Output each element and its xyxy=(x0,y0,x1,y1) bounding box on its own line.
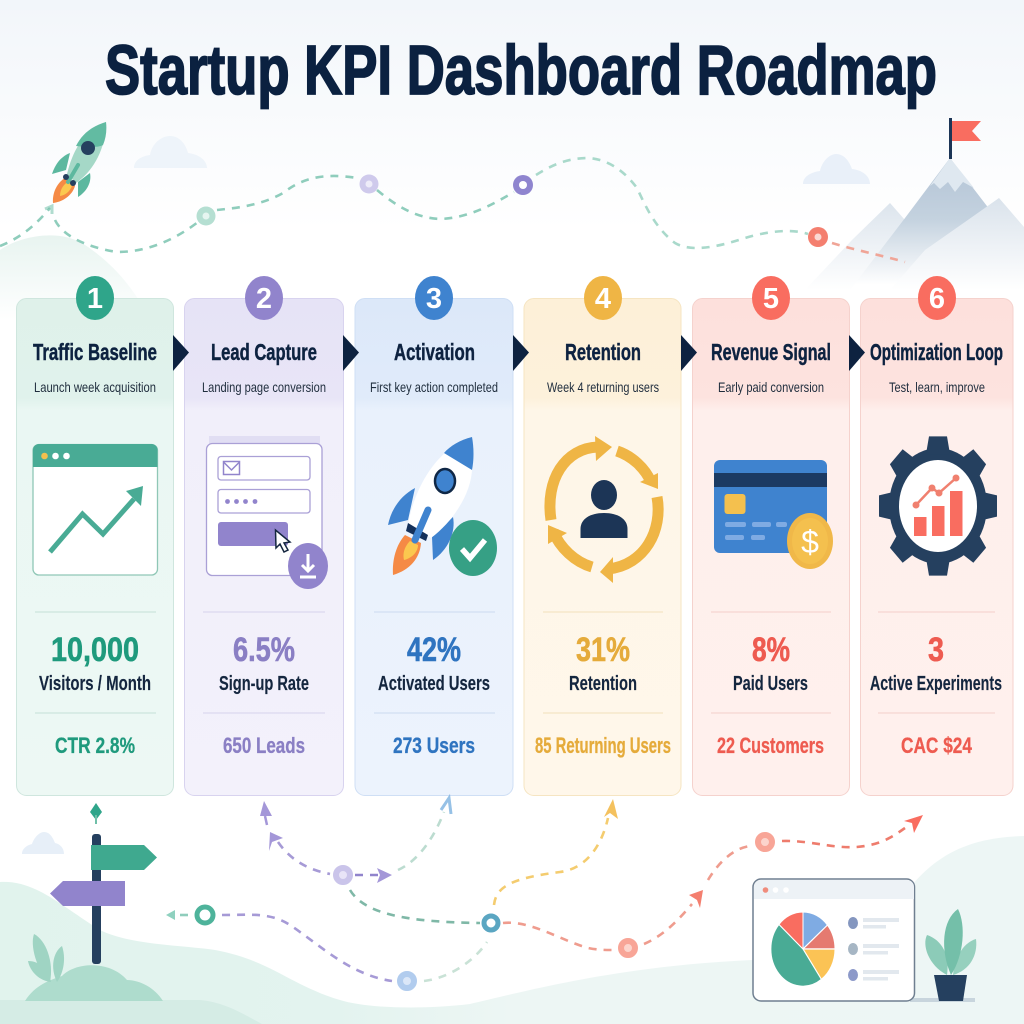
step badge 2: 2 xyxy=(256,283,272,315)
step badge 4: 4 xyxy=(595,283,611,315)
hill: bottom foreground xyxy=(0,1000,262,1024)
metric value: 3 xyxy=(928,631,944,669)
step subtitle: Launch week acquisition xyxy=(34,379,156,395)
icon: gear with chart xyxy=(855,408,1021,604)
icon: small plant xyxy=(28,934,64,982)
secondary metric: CAC $24 xyxy=(901,733,973,758)
node xyxy=(621,941,635,955)
icon: browser trend chart xyxy=(33,444,158,575)
hill: top left xyxy=(0,235,150,320)
step badge 1: 1 xyxy=(87,283,103,315)
cloud: bottom left xyxy=(22,832,64,854)
node xyxy=(336,868,350,882)
step badge 3 xyxy=(415,276,453,320)
mountains with summit flag xyxy=(805,118,1024,290)
metric label: Visitors / Month xyxy=(39,673,151,695)
icon: retention loop with user xyxy=(548,436,658,583)
metric value: 6.5% xyxy=(233,631,295,669)
step heading: Activation xyxy=(394,339,475,365)
step subtitle: Early paid conversion xyxy=(718,379,824,395)
step badge 5: 5 xyxy=(763,283,779,315)
step heading: Revenue Signal xyxy=(711,339,831,365)
secondary metric: 273 Users xyxy=(393,733,475,758)
step subtitle: First key action completed xyxy=(370,379,498,395)
metric value: 31% xyxy=(576,631,630,669)
page background xyxy=(0,0,1024,230)
node xyxy=(484,916,498,930)
metric label: Paid Users xyxy=(733,673,808,695)
step subtitle: Week 4 returning users xyxy=(547,379,659,395)
hill: bottom continuous band xyxy=(0,836,1024,1024)
node xyxy=(360,174,378,194)
step heading: Retention xyxy=(565,339,641,365)
secondary metric: 22 Customers xyxy=(717,733,824,758)
arrow: step 3 to 4 xyxy=(513,335,529,371)
panel: Activation xyxy=(355,298,513,796)
icon: rocket with check badge xyxy=(388,437,497,576)
step subtitle: Test, learn, improve xyxy=(889,379,985,395)
panel: Lead Capture xyxy=(184,298,344,796)
panel: Traffic Baseline xyxy=(16,298,174,796)
icon: sign-up form xyxy=(206,436,328,589)
step badge 3: 3 xyxy=(426,283,442,315)
node xyxy=(758,835,772,849)
step badge 6: 6 xyxy=(929,283,945,315)
icon: potted plant xyxy=(925,909,976,1001)
arrow: step 4 to 5 xyxy=(681,335,697,371)
node xyxy=(808,227,828,247)
legend xyxy=(848,917,899,981)
step heading: Lead Capture xyxy=(211,339,317,365)
metric label: Activated Users xyxy=(378,673,490,695)
node xyxy=(197,907,213,923)
panel: Retention xyxy=(524,298,681,796)
step badge 2 xyxy=(245,276,283,320)
step heading: Traffic Baseline xyxy=(33,339,157,365)
arrow: step 5 to 6 xyxy=(849,335,865,371)
ground shadow xyxy=(910,998,975,1002)
metric value: 10,000 xyxy=(51,631,139,669)
secondary metric: 650 Leads xyxy=(223,733,305,758)
pie chart xyxy=(771,912,835,986)
step badge 5 xyxy=(752,276,790,320)
icon: dashboard window with pie chart xyxy=(753,879,914,1001)
icon: green rocket xyxy=(52,122,106,203)
icon: flag xyxy=(949,118,981,159)
cloud: top left xyxy=(134,136,207,168)
step subtitle: Landing page conversion xyxy=(202,379,326,395)
icon: credit card with coin xyxy=(714,460,833,569)
bottom route arrows xyxy=(90,798,923,988)
metric label: Sign-up Rate xyxy=(219,673,309,695)
icon: signpost xyxy=(25,834,163,1001)
icon: credit card with coin: $ xyxy=(801,524,819,560)
panel: Revenue Signal xyxy=(692,298,850,796)
arrow: step 2 to 3 xyxy=(343,335,359,371)
arrow: step 1 to 2 xyxy=(173,335,189,371)
node xyxy=(196,206,216,226)
cloud: top right xyxy=(803,154,870,184)
panel: Optimization Loop xyxy=(855,298,1021,796)
node xyxy=(513,175,533,195)
step badge 4 xyxy=(584,276,622,320)
node xyxy=(400,974,414,988)
step badge 1 xyxy=(76,276,114,320)
secondary metric: CTR 2.8% xyxy=(55,733,135,758)
metric value: 42% xyxy=(407,631,461,669)
metric label: Retention xyxy=(569,673,637,695)
metric value: 8% xyxy=(752,631,790,669)
step badge 6 xyxy=(918,276,956,320)
secondary metric: 85 Returning Users xyxy=(535,733,671,758)
top roadmap dashed path xyxy=(0,158,905,262)
